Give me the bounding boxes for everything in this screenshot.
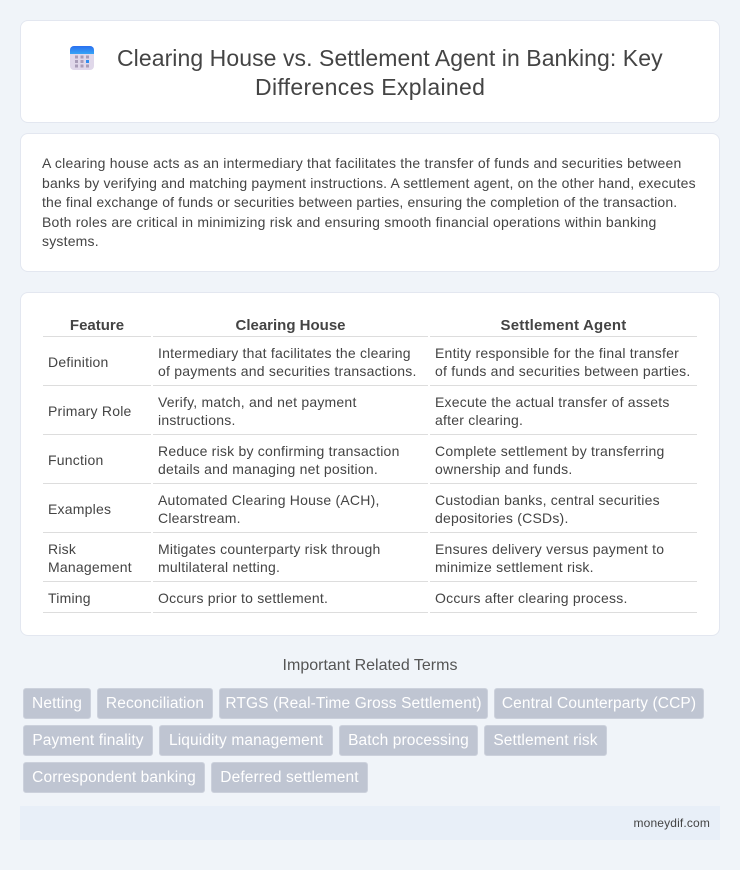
footer bar [20,806,720,840]
comparison table: depositories (CSDs). [435,510,569,526]
related term tags [23,688,704,793]
comparison table: Complete settlement by transferring [435,443,664,459]
comparison table: Risk [48,541,76,557]
comparison table [43,317,697,613]
footer source: moneydif.com [634,816,710,830]
comparison table: Occurs after clearing process. [435,590,628,606]
related term tags: Central Counterparty (CCP) [502,695,696,712]
comparison table: Primary Role [48,403,132,419]
related term tags: Reconciliation [106,695,204,712]
table panel [20,292,720,636]
comparison table: Mitigates counterparty risk through [158,541,380,557]
related term tags: RTGS (Real-Time Gross Settlement) [225,695,482,712]
comparison table: Examples [48,501,111,517]
intro text: A clearing house acts as an intermediary that facilitates the transfer of funds and securities between [42,155,682,171]
comparison table: Settlement Agent [500,317,626,334]
intro text: the final exchange of funds or securities between parties, ensuring the completion of the transaction. [42,194,677,210]
intro panel [20,133,720,272]
comparison table: Verify, match, and net payment [158,394,357,410]
comparison table: instructions. [158,412,236,428]
comparison table: multilateral netting. [158,559,280,575]
comparison table: Intermediary that facilitates the clearing [158,345,411,361]
comparison table: Execute the actual transfer of assets [435,394,670,410]
related term tags: Netting [32,695,82,712]
related term tags: Batch processing [348,732,469,749]
title: Clearing House vs. Settlement Agent in Banking: Key [117,45,663,71]
comparison table: Entity responsible for the final transfer [435,345,679,361]
header card [20,20,720,123]
comparison table: Function [48,452,103,468]
comparison table: after clearing. [435,412,523,428]
comparison table: Timing [48,590,91,606]
icon: calendar [70,46,94,70]
comparison table: Definition [48,354,109,370]
related term tags: Liquidity management [169,732,323,749]
related term tags: Payment finality [32,732,144,749]
comparison table: minimize settlement risk. [435,559,594,575]
related term tags: Settlement risk [493,732,598,749]
intro text [42,155,696,249]
comparison table: of payments and securities transactions. [158,363,417,379]
comparison table: Ensures delivery versus payment to [435,541,664,557]
intro text: banks by verifying and matching payment instructions. A settlement agent, on the other hand, executes [42,175,696,191]
comparison table: details and managing net position. [158,461,378,477]
comparison table: ownership and funds. [435,461,572,477]
title [117,45,663,100]
related term tags: Correspondent banking [32,769,196,786]
comparison table: Occurs prior to settlement. [158,590,328,606]
comparison table: Clearing House [235,317,346,334]
comparison table: Clearstream. [158,510,241,526]
comparison table: Automated Clearing House (ACH), [158,492,380,508]
comparison table: Reduce risk by confirming transaction [158,443,400,459]
intro text: systems. [42,233,99,249]
related term tags: Deferred settlement [220,769,359,786]
intro text: Both roles are critical in minimizing risk and ensuring smooth financial operations within banking [42,214,657,230]
related terms heading: Important Related Terms [283,657,457,674]
comparison table: Feature [70,317,124,334]
comparison table: of funds and securities between parties. [435,363,691,379]
comparison table: Custodian banks, central securities [435,492,660,508]
comparison table: Management [48,559,132,575]
title: Differences Explained [255,74,485,100]
